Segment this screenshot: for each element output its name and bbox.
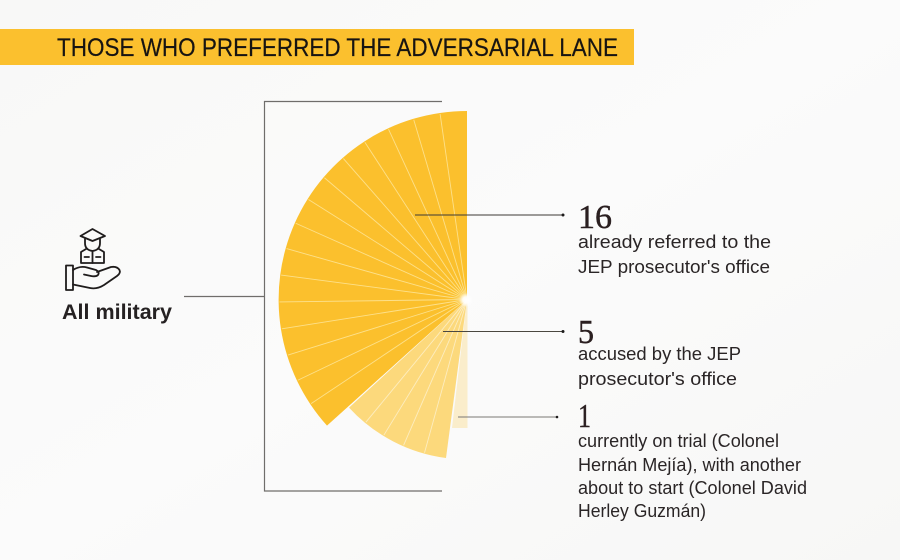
wedge: 1 on trial bbox=[452, 300, 468, 428]
callout: 16 referred: JEP prosecutor's office bbox=[578, 256, 770, 277]
callout: 16 referred bbox=[578, 199, 771, 277]
callout: 1 on trial: Herley Guzmán) bbox=[578, 500, 706, 521]
title: THOSE WHO PREFERRED THE ADVERSARIAL LANE bbox=[57, 34, 618, 62]
leader line: 1 bbox=[458, 416, 558, 418]
icon: hand holding soldier bbox=[66, 229, 120, 290]
centre glow bbox=[459, 293, 473, 307]
callout: 1 on trial: currently on trial (Colonel bbox=[578, 430, 779, 451]
callout: 16 referred: 16 bbox=[578, 199, 612, 236]
callout: 5 accused: accused by the JEP bbox=[578, 343, 741, 364]
label: all military: All military bbox=[62, 301, 172, 324]
callout: 5 accused: 5 bbox=[578, 314, 594, 351]
callout: 5 accused: prosecutor's office bbox=[578, 368, 737, 389]
bracket: all military total bbox=[184, 102, 442, 491]
callout: 1 on trial: Hernán Mejía), with another bbox=[578, 454, 801, 475]
wedges: 16 referred to the prosecutor's office bbox=[279, 111, 467, 426]
fan chart: 22 military cases bbox=[279, 111, 473, 458]
callout: 1 on trial bbox=[578, 398, 807, 521]
callout: 1 on trial: about to start (Colonel David bbox=[578, 477, 807, 498]
leader line: 5 bbox=[443, 330, 564, 333]
callout: 16 referred: already referred to the bbox=[578, 231, 771, 252]
leader line: 16 bbox=[415, 214, 564, 216]
callout: 5 accused bbox=[578, 314, 741, 389]
callout: 1 on trial: 1 bbox=[578, 398, 591, 435]
title bbox=[0, 29, 634, 65]
wedges: 5 accused bbox=[349, 300, 467, 458]
